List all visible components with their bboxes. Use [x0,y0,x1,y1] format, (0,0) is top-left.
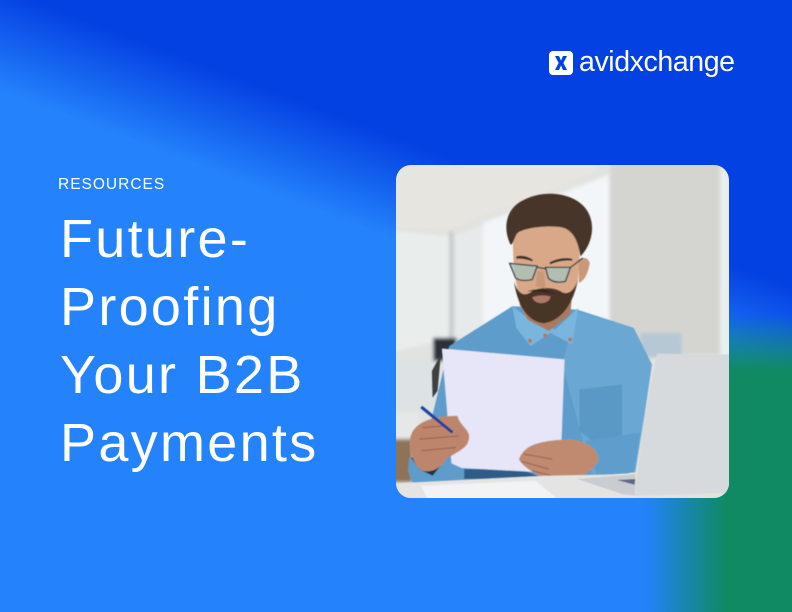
glasses [510,258,583,282]
laptop [577,354,742,496]
shirt [409,306,652,483]
pen [421,407,452,433]
neck and face [518,300,572,332]
title: Proofing [60,277,280,337]
desk [383,474,635,511]
man and foreground [396,192,729,498]
eyebrow label: RESOURCES [58,176,165,193]
photo background: office [396,165,729,498]
logo wordmark: avidxchange [579,46,735,78]
photo: man reading document at laptop [396,165,729,498]
title: Future- [60,209,250,269]
icon: logo mark [549,51,573,75]
hair [506,194,592,256]
logo: avidxchange [549,46,735,78]
title: Payments [60,413,318,473]
right sleeve [585,433,640,476]
right hand [518,438,600,476]
left cuff [408,457,464,483]
chair [432,354,441,398]
title: Your B2B [60,345,305,405]
title [60,209,318,473]
document held in hands [442,348,564,472]
left hand [410,416,469,471]
